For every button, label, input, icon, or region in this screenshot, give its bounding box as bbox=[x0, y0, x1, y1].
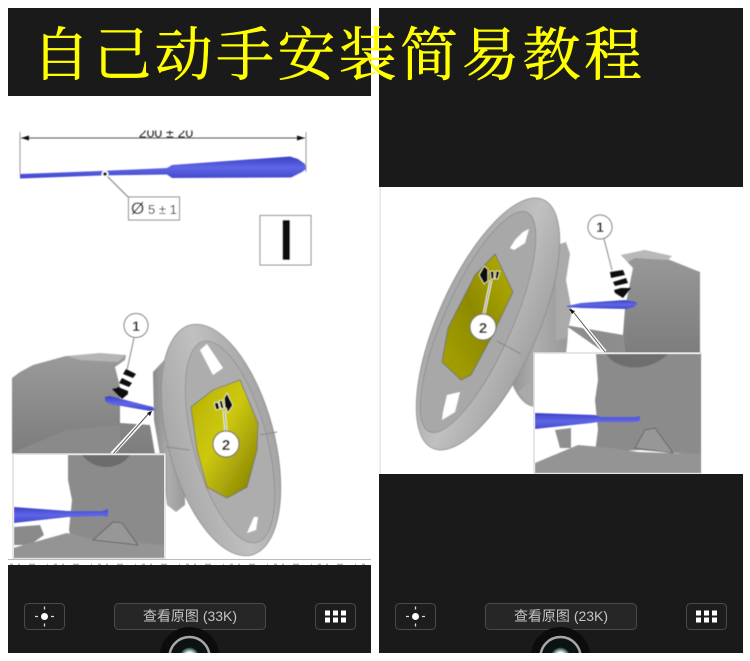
blue rod in use bbox=[567, 300, 637, 309]
wheel spoke line bbox=[166, 432, 277, 450]
view original button: 查看原图 (23K) bbox=[514, 608, 608, 624]
dimension label: 200 ± 20 bbox=[139, 124, 193, 140]
dashboard bbox=[12, 355, 155, 454]
camera button: left bbox=[160, 627, 219, 653]
steering column bbox=[502, 243, 568, 407]
callout 2 with arrow bbox=[470, 266, 500, 340]
callout 1 with arrow: 1 bbox=[596, 219, 604, 235]
rod dimension diagram bbox=[20, 124, 311, 265]
panel: left phone screenshot bbox=[8, 8, 371, 661]
blue rod in use bbox=[105, 396, 155, 411]
dashboard bbox=[621, 250, 700, 353]
callout 2 with arrow: 2 bbox=[222, 437, 230, 454]
zoom inset bbox=[13, 454, 165, 558]
diameter callout: 5 ± 1 bbox=[148, 202, 177, 217]
callout 1 with arrow bbox=[112, 314, 148, 399]
callout 1 with arrow bbox=[588, 215, 631, 298]
panel: right phone screenshot bbox=[379, 8, 743, 661]
wheel windows bbox=[200, 344, 223, 375]
wheel ring bbox=[139, 311, 303, 569]
callout 1 with arrow: 1 bbox=[132, 318, 140, 334]
diameter callout bbox=[128, 197, 180, 220]
white guide line to inset bbox=[112, 414, 149, 454]
callout 2 with arrow: 2 bbox=[479, 320, 487, 337]
yellow airbag cover bbox=[442, 254, 513, 380]
title: 自己动手安装简易教程 bbox=[32, 23, 642, 88]
wheel spoke line bbox=[497, 341, 521, 354]
wheel windows bbox=[510, 229, 529, 250]
grid button bbox=[316, 604, 356, 630]
zoom inset bbox=[534, 353, 701, 473]
view original button bbox=[114, 604, 266, 630]
buttons: right bbox=[396, 604, 726, 630]
view original button: 查看原图 (33K) bbox=[143, 608, 237, 624]
steering wheel removal illustration, right bbox=[387, 179, 700, 469]
callout 2 with arrow bbox=[213, 393, 239, 457]
diameter callout: Ø bbox=[131, 199, 144, 218]
camera button: right bbox=[531, 627, 590, 653]
steering wheel removal illustration, left bbox=[12, 311, 303, 569]
blue handle rod bbox=[20, 156, 306, 178]
yellow airbag cover bbox=[191, 380, 258, 498]
steering column bbox=[153, 358, 185, 512]
caption strip under the screenshot bbox=[8, 560, 371, 564]
locate button bbox=[396, 604, 436, 630]
grid button bbox=[686, 604, 726, 630]
locate button bbox=[24, 604, 64, 630]
white guide line to inset bbox=[571, 310, 605, 352]
wheel ring bbox=[387, 179, 589, 469]
view original button bbox=[486, 604, 636, 630]
buttons: left bbox=[24, 604, 356, 630]
tool icon box bbox=[260, 216, 311, 265]
